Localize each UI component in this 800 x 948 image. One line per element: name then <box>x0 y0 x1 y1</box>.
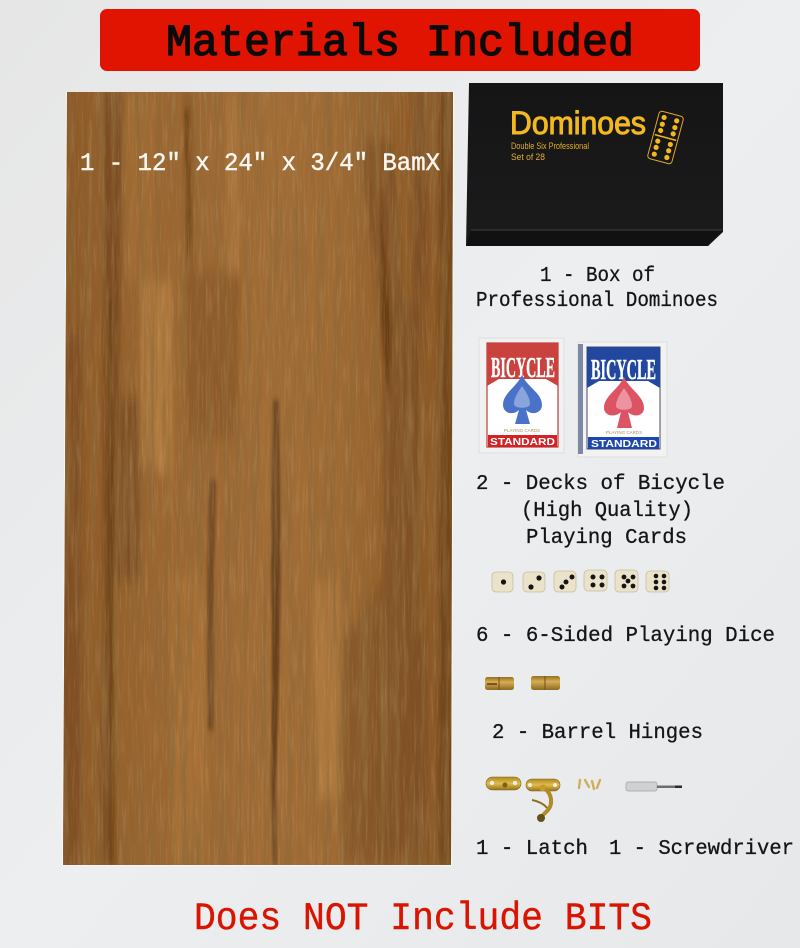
icon: screws <box>579 780 600 789</box>
title banner: Materials Included <box>166 19 634 69</box>
domino label: Professional Dominoes <box>476 289 718 313</box>
icon: die 4 <box>584 570 607 591</box>
icon: latch hook <box>526 779 560 822</box>
icon: latch plate <box>486 777 521 790</box>
icon: die 5 <box>615 570 638 592</box>
domino label: 1 - Box of <box>540 264 655 288</box>
board label: 1 - 12" x 24" x 3/4" BamX <box>80 150 440 178</box>
hardware label: 1 - Screwdriver <box>609 837 794 861</box>
icon: die 2 <box>523 572 545 592</box>
hardware label: 1 - Latch <box>476 837 588 861</box>
domino box <box>466 83 723 246</box>
playing cards label <box>476 472 725 550</box>
icon: hinge left <box>485 677 514 690</box>
red deck of cards: BICYCLE <box>491 352 555 384</box>
domino box: Set of 28 <box>511 152 545 162</box>
playing cards label: Playing Cards <box>526 526 687 550</box>
hinges label: 2 - Barrel Hinges <box>492 721 703 745</box>
disclaimer: Does NOT Include BITS <box>194 897 652 941</box>
red deck of cards <box>479 338 564 453</box>
hardware label <box>476 837 794 861</box>
hardware row <box>486 777 682 822</box>
box wordmark: Dominoes <box>510 105 646 141</box>
icon: die 3 <box>554 571 576 592</box>
icon: screwdriver <box>626 782 682 791</box>
icon: die 1 <box>492 572 513 592</box>
dice label: 6 - 6-Sided Playing Dice <box>476 624 775 648</box>
red deck of cards: STANDARD <box>490 436 555 448</box>
playing cards label: (High Quality) <box>521 499 693 523</box>
icon: domino <box>647 111 684 164</box>
domino box: Double Six Professional <box>511 141 589 151</box>
icon: hinge right <box>531 676 560 690</box>
dice row <box>492 570 669 592</box>
blue deck of cards: STANDARD <box>591 438 657 450</box>
blue deck of cards: BICYCLE <box>591 354 656 386</box>
domino label <box>476 264 718 313</box>
wood board panel <box>60 92 456 866</box>
blue deck of cards <box>578 342 667 457</box>
red deck of cards: PLAYING CARDS <box>504 428 540 433</box>
blue deck of cards: PLAYING CARDS <box>606 430 642 435</box>
title banner <box>100 9 700 71</box>
playing cards label: 2 - Decks of Bicycle <box>476 472 725 496</box>
barrel hinges <box>485 676 560 690</box>
icon: die 6 <box>646 571 669 592</box>
